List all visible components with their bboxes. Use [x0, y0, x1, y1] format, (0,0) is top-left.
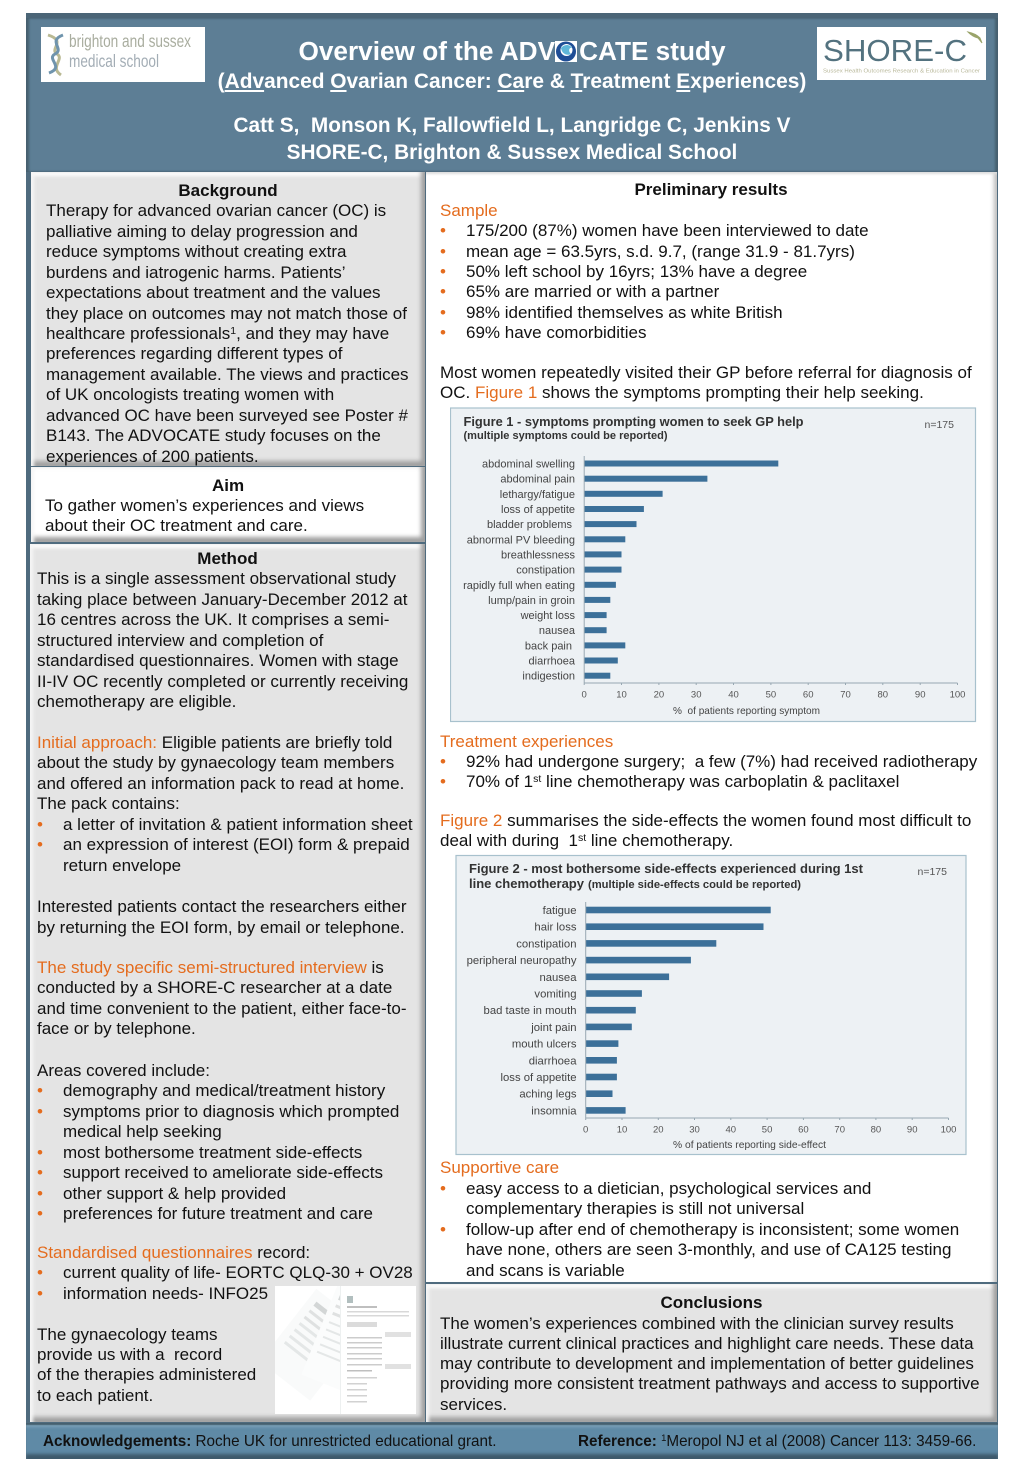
chart: figure 2 side-effects: 50: [762, 1124, 772, 1136]
chart: figure 2 side-effects: (multiple side-effects could be reported): [588, 879, 801, 891]
chart: figure 2 side-effects: mouth ulcers: [512, 1039, 577, 1051]
sample section: OC. Figure 1 shows the symptoms prompting their help seeking.: [440, 383, 924, 402]
background text: of UK oncologists treating women with: [46, 385, 334, 404]
method text: Initial approach: Eligible patients are briefly told: [37, 733, 392, 752]
method text: face or by telephone.: [37, 1019, 196, 1038]
method text: demography and medical/treatment history: [63, 1081, 385, 1100]
method text: II-IV OC recently completed or currently receiving: [37, 672, 408, 691]
chart: figure 1 symptoms: back pain: [525, 640, 572, 652]
chart: figure 2 side-effects: 30: [689, 1124, 700, 1136]
reference: Reference: 1Meropol NJ et al (2008) Cancer 113: 3459-66.: [578, 1433, 976, 1450]
method text: most bothersome treatment side-effects: [63, 1143, 362, 1162]
chart: figure 1 symptoms: [450, 407, 976, 722]
method text: conducted by a SHORE-C researcher at a date: [37, 978, 392, 997]
method text: other support & help provided: [63, 1184, 286, 1203]
chart: figure 1 symptoms: 60: [803, 690, 813, 700]
background text: Therapy for advanced ovarian cancer (OC) is: [46, 201, 386, 220]
background text: experiences of 200 patients.: [46, 447, 259, 466]
affiliation: SHORE-C, Brighton & Sussex Medical School: [287, 141, 737, 164]
aim text: about their OC treatment and care.: [45, 516, 308, 535]
method text: of the therapies administered: [37, 1365, 256, 1384]
heading: preliminary results: Preliminary results: [634, 180, 788, 199]
method text: a letter of invitation & patient information sheet: [63, 815, 413, 834]
logo: SHORE-C: [817, 27, 986, 80]
background text: expectations about treatment and the values: [46, 283, 381, 302]
logo: SHORE-C: Sussex Health Outcomes Research & Education in Cancer: [823, 68, 980, 74]
supportive care section: [440, 1158, 959, 1280]
treatment experiences section: [440, 732, 978, 850]
chart: figure 1 symptoms: Figure 1 - symptoms prompting women to seek GP help: [464, 414, 804, 429]
aim text: [45, 496, 364, 535]
chart: figure 1 symptoms: abdominal pain: [500, 474, 575, 486]
conclusions text: illustrate current clinical practices and highlight care needs. These data: [440, 1334, 974, 1353]
chart: figure 2 side-effects: insomnia: [531, 1105, 577, 1117]
chart: figure 1 symptoms: 100: [950, 690, 965, 700]
header banner: [26, 13, 998, 172]
chart: figure 1 symptoms: constipation: [516, 565, 575, 577]
chart: figure 2 side-effects: Figure 2 - most bothersome side-effects experienced during 1st: [469, 861, 864, 876]
supportive care section: easy access to a dietician, psychological services and: [466, 1179, 871, 1198]
background text: they place on outcomes may not match those of: [46, 304, 407, 323]
chart: figure 2 side-effects: 70: [834, 1124, 845, 1136]
method text: preferences for future treatment and care: [63, 1204, 373, 1223]
background text: burdens and iatrogenic harms. Patients’: [46, 263, 346, 282]
conclusions text: The women’s experiences combined with the clinician survey results: [440, 1314, 954, 1333]
method text: The study specific semi-structured interview is: [37, 958, 384, 977]
supportive care section: complementary therapies is still not universal: [466, 1199, 804, 1218]
sample section: 50% left school by 16yrs; 13% have a degree: [466, 262, 807, 281]
chart: figure 1 symptoms: breathlessness: [501, 549, 575, 561]
chart: figure 2 side-effects: 0: [583, 1124, 588, 1136]
chart: figure 2 side-effects: bad taste in mouth: [484, 1005, 576, 1017]
sample section: 69% have comorbidities: [466, 323, 646, 342]
chart: figure 2 side-effects: aching legs: [519, 1089, 577, 1101]
chart: figure 1 symptoms: 40: [728, 690, 739, 700]
chart: figure 2 side-effects: hair loss: [534, 922, 577, 934]
sample section: 98% identified themselves as white British: [466, 303, 783, 322]
authors: Catt S, Monson K, Fallowfield L, Langridge C, Jenkins V: [234, 114, 790, 137]
method text: Interested patients contact the researchers either: [37, 897, 406, 916]
chart: figure 2 side-effects: diarrhoea: [529, 1055, 577, 1067]
chart: figure 1 symptoms: abdominal swelling: [482, 458, 575, 470]
supportive care section: Supportive care: [440, 1158, 559, 1177]
chart: figure 2 side-effects: 10: [617, 1124, 627, 1136]
chart: figure 2 side-effects: 40: [726, 1124, 736, 1136]
method text: 16 centres across the UK. It comprises a semi-: [37, 610, 389, 629]
heading: aim: Aim: [212, 476, 244, 495]
method text: [37, 569, 413, 1405]
treatment experiences section: Treatment experiences: [440, 732, 613, 751]
chart: figure 1 symptoms: 90: [915, 690, 925, 700]
supportive care section: have none, others are seen 3-monthly, and use of CA125 testing: [466, 1240, 951, 1259]
chart: figure 1 symptoms: (multiple symptoms could be reported): [464, 430, 668, 442]
heading: method: Method: [197, 549, 258, 568]
method text: about the study by gynaecology team members: [37, 753, 394, 772]
chart: figure 1 symptoms: abnormal PV bleeding: [467, 534, 575, 546]
method text: symptoms prior to diagnosis which prompted: [63, 1102, 399, 1121]
conclusions text: [440, 1314, 980, 1414]
subtitle: (Advanced Ovarian Cancer: Care & Treatment Experiences): [218, 70, 806, 93]
chart: figure 1 symptoms: bladder problems: [487, 519, 572, 531]
chart: figure 1 symptoms: 30: [691, 690, 701, 700]
chart: figure 1 symptoms: 50: [766, 690, 776, 700]
method text: to each patient.: [37, 1386, 153, 1405]
chart: figure 2 side-effects: joint pain: [530, 1022, 576, 1034]
method text: The pack contains:: [37, 794, 180, 813]
treatment experiences section: deal with during 1st line chemotherapy.: [440, 831, 733, 850]
method text: support received to ameliorate side-effects: [63, 1163, 383, 1182]
method text: standardised questionnaires. Women with stage: [37, 651, 399, 670]
method text: by returning the EOI form, by email or telephone.: [37, 918, 405, 937]
background text: management available. The views and practices: [46, 365, 409, 384]
chart: figure 1 symptoms: nausea: [539, 625, 576, 637]
chart: figure 2 side-effects: peripheral neuropathy: [467, 955, 577, 967]
background text: B143. The ADVOCATE study focuses on the: [46, 426, 381, 445]
method text: structured interview and completion of: [37, 631, 323, 650]
chart: figure 1 symptoms: indigestion: [522, 671, 575, 683]
conclusions text: providing more consistent treatment pathways and access to supportive: [440, 1374, 980, 1393]
panel: conclusions: [426, 1284, 997, 1422]
treatment experiences section: 92% had undergone surgery; a few (7%) had received radiotherapy: [466, 752, 977, 771]
sample section: 175/200 (87%) women have been interviewed to date: [466, 221, 869, 240]
chart: figure 2 side-effects: % of patients reporting side-effect: [673, 1139, 826, 1151]
chart: figure 2 side-effects: nausea: [539, 972, 577, 984]
treatment experiences section: 70% of 1st line chemotherapy was carboplatin & paclitaxel: [466, 772, 899, 791]
chart: figure 2 side-effects: [455, 854, 967, 1156]
chart: figure 1 symptoms: 80: [878, 690, 888, 700]
logo: Brighton and Sussex Medical School: [41, 27, 205, 82]
treatment experiences section: Figure 2 summarises the side-effects the women found most difficult to: [440, 811, 971, 830]
background text: preferences regarding different types of: [46, 344, 342, 363]
logo: Brighton and Sussex Medical School: medical school: [69, 51, 159, 71]
panel: preliminary results: [426, 172, 997, 1282]
method text: return envelope: [63, 856, 181, 875]
image: questionnaire pages: [275, 1286, 416, 1414]
chart: figure 1 symptoms: 0: [582, 690, 587, 700]
method text: Areas covered include:: [37, 1061, 210, 1080]
sample section: [440, 201, 972, 402]
acknowledgements: Acknowledgements: Roche UK for unrestricted educational grant.: [43, 1433, 496, 1450]
supportive care section: follow-up after end of chemotherapy is inconsistent; some women: [466, 1220, 959, 1239]
panel: aim: [31, 467, 425, 542]
chart: figure 1 symptoms: % of patients reporting symptom: [673, 705, 820, 717]
background text: palliative aiming to delay progression and: [46, 222, 358, 241]
chart: figure 2 side-effects: 20: [653, 1124, 664, 1136]
method text: taking place between January-December 2012 at: [37, 590, 407, 609]
aim text: To gather women’s experiences and views: [45, 496, 364, 515]
chart: figure 1 symptoms: loss of appetite: [501, 504, 575, 516]
background text: healthcare professionals1, and they may have: [46, 324, 389, 343]
supportive care section: and scans is variable: [466, 1261, 625, 1280]
chart: figure 2 side-effects: loss of appetite: [500, 1072, 576, 1084]
chart: figure 2 side-effects: 100: [941, 1124, 956, 1136]
chart: figure 2 side-effects: n=175: [918, 866, 947, 878]
background text: reduce symptoms without creating extra: [46, 242, 346, 261]
chart: figure 1 symptoms: weight loss: [520, 610, 575, 622]
chart: figure 2 side-effects: 60: [798, 1124, 809, 1136]
chart: figure 2 side-effects: fatigue: [543, 905, 576, 917]
method text: provide us with a record: [37, 1345, 222, 1364]
panel: method: [30, 544, 425, 1422]
background text: [46, 201, 409, 466]
chart: figure 1 symptoms: rapidly full when eating: [463, 580, 575, 592]
background text: advanced OC have been surveyed see Poster #: [46, 406, 408, 425]
method text: The gynaecology teams: [37, 1325, 218, 1344]
method text: medical help seeking: [63, 1122, 222, 1141]
heading: conclusions: Conclusions: [660, 1293, 762, 1312]
sample section: Sample: [440, 201, 498, 220]
method text: an expression of interest (EOI) form & prepaid: [63, 835, 410, 854]
method text: and offered an information pack to read at home.: [37, 774, 404, 793]
sample section: Most women repeatedly visited their GP before referral for diagnosis of: [440, 363, 972, 382]
chart: figure 1 symptoms: lethargy/fatigue: [500, 489, 575, 501]
method text: This is a single assessment observational study: [37, 569, 396, 588]
chart: figure 2 side-effects: vomiting: [534, 988, 576, 1000]
sample section: mean age = 63.5yrs, s.d. 9.7, (range 31.9 - 81.7yrs): [466, 242, 855, 260]
chart: figure 1 symptoms: 10: [616, 690, 627, 700]
chart: figure 2 side-effects: constipation: [516, 938, 576, 950]
method text: chemotherapy are eligible.: [37, 692, 236, 711]
chart: figure 1 symptoms: diarrhoea: [529, 656, 576, 668]
chart: figure 2 side-effects: line chemotherapy: [469, 876, 585, 891]
chart: figure 1 symptoms: lump/pain in groin: [488, 595, 575, 607]
conclusions text: services.: [440, 1395, 507, 1414]
title: O: [566, 56, 567, 58]
conclusions text: may contribute to development and implementation of better guidelines: [440, 1354, 974, 1373]
panel: background: [31, 172, 425, 466]
logo: SHORE-C: SHORE-C: [823, 34, 967, 68]
sample section: 65% are married or with a partner: [466, 282, 719, 301]
method text: and time convenient to the patient, either face-to-: [37, 999, 407, 1018]
chart: figure 1 symptoms: n=175: [924, 419, 954, 431]
footer bar: [26, 1423, 998, 1459]
chart: figure 1 symptoms: 20: [654, 690, 664, 700]
heading: background: Background: [178, 181, 278, 200]
method text: current quality of life- EORTC QLQ-30 + OV28: [63, 1263, 413, 1282]
chart: figure 2 side-effects: 80: [871, 1124, 881, 1136]
method text: information needs- INFO25: [63, 1284, 268, 1303]
title: Overview of the ADV CATE study: [298, 36, 726, 66]
method text: Standardised questionnaires record:: [37, 1243, 310, 1262]
chart: figure 1 symptoms: 70: [840, 690, 851, 700]
chart: figure 2 side-effects: 90: [907, 1124, 917, 1136]
